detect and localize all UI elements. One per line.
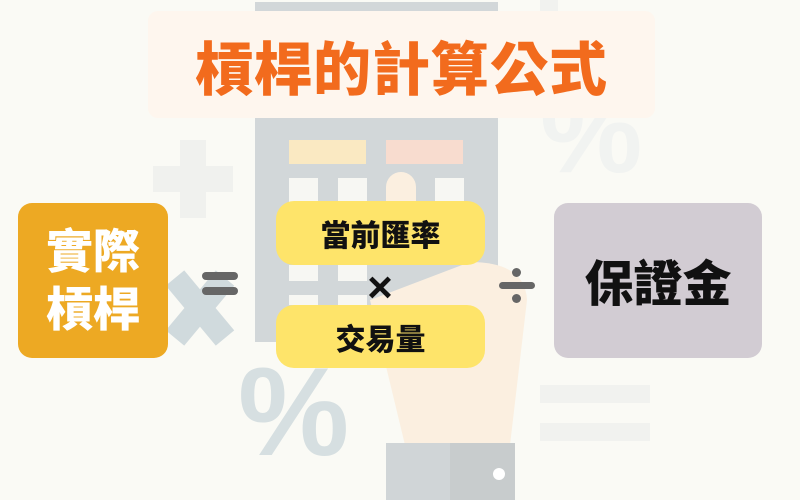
percent signs: %	[238, 343, 349, 482]
title	[148, 11, 655, 118]
hand	[370, 172, 527, 445]
gray x	[175, 278, 225, 338]
plus	[153, 140, 233, 218]
box: actual leverage	[18, 203, 168, 358]
box: volume: 交易量	[336, 324, 426, 356]
box: margin	[554, 203, 762, 358]
box: margin: 保證金	[584, 258, 732, 312]
multiply sign: ×	[367, 263, 393, 312]
box: current rate: 當前匯率	[320, 220, 440, 253]
box: actual leverage: 實際	[46, 224, 140, 278]
divide sign	[499, 268, 535, 303]
title: 槓桿的計算公式	[195, 38, 608, 102]
background decorations: %	[540, 69, 642, 197]
right decorative bars	[540, 0, 650, 441]
equals sign	[202, 272, 238, 295]
calculator body	[255, 2, 498, 342]
box: current rate	[276, 201, 485, 265]
sleeve	[386, 443, 515, 500]
box: volume	[276, 305, 485, 368]
box: actual leverage: 槓桿	[46, 282, 140, 336]
